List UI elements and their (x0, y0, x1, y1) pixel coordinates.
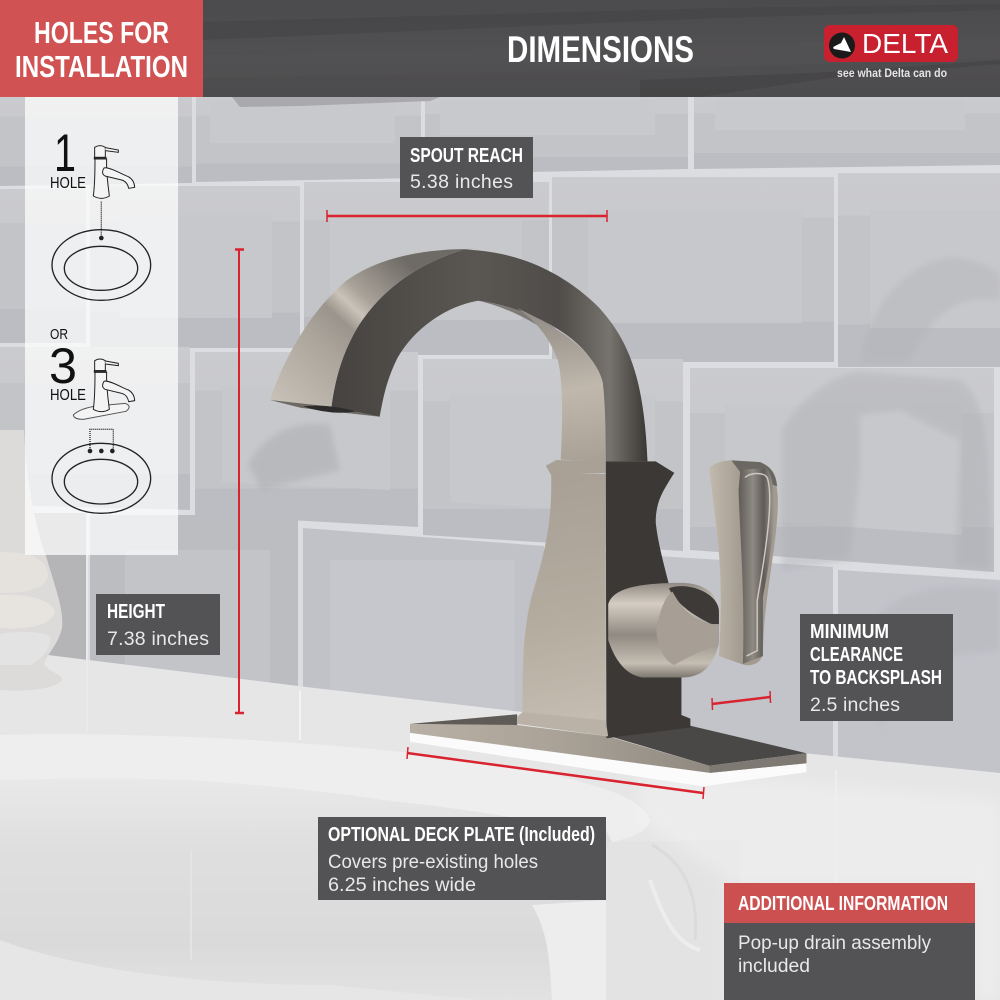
callout: additional information: ADDITIONAL INFORMATION (738, 893, 948, 915)
panel: holes for installation heading: HOLES FOR (34, 15, 169, 50)
dimension line: deck plate (407, 747, 704, 799)
callout: minimum clearance: CLEARANCE (810, 644, 903, 666)
handle (709, 460, 778, 665)
icon: three hole faucet and sink (52, 359, 151, 513)
callout: additional information: Pop-up drain assembly (738, 932, 931, 954)
label: 3 hole: HOLE (50, 387, 86, 404)
callout: additional information: included (738, 955, 810, 977)
background: wall of subway tiles (0, 0, 1000, 800)
faucet (270, 249, 806, 786)
deck plate (410, 714, 806, 773)
callout: spout reach: SPOUT REACH (410, 145, 523, 167)
callout: optional deck plate (318, 817, 606, 900)
logo: delta (824, 25, 958, 80)
callout: minimum clearance: 2.5 inches (810, 694, 900, 716)
callout: spout reach: 5.38 inches (410, 171, 513, 193)
callout: minimum clearance: TO BACKSPLASH (810, 667, 942, 689)
background: glass jar with stones (0, 430, 62, 691)
panel: holes for installation heading: INSTALLATION (15, 49, 188, 84)
callout: additional information (724, 883, 975, 1000)
title: dimensions: DIMENSIONS (507, 29, 694, 70)
faint reflections in tiles (782, 372, 990, 570)
label: 3 hole (49, 338, 86, 404)
white reflection under deck plate (410, 732, 806, 786)
callout: spout reach (400, 137, 533, 198)
dimension line: spout reach (327, 210, 607, 222)
callout: optional deck plate: OPTIONAL DECK PLATE (Included) (328, 824, 595, 846)
icon: one hole faucet and sink (52, 146, 151, 300)
logo: delta: DELTA (862, 28, 948, 59)
label: 1 hole: HOLE (50, 175, 86, 192)
callout: optional deck plate: Covers pre-existing holes (328, 851, 538, 873)
callout: optional deck plate: 6.25 inches wide (328, 874, 476, 896)
logo: delta: see what Delta can do (837, 66, 947, 80)
spout (270, 249, 647, 462)
callout: minimum clearance: MINIMUM (810, 621, 889, 643)
dimension line: height (235, 249, 244, 713)
background: counter and sink (0, 555, 1000, 1000)
label: 3 hole: 3 (49, 338, 77, 394)
dimension line: clearance (712, 691, 770, 710)
callout: minimum clearance (800, 614, 953, 721)
panel: hole options (25, 97, 178, 555)
label: or: OR (50, 326, 68, 343)
label: 1 hole: 1 (54, 124, 76, 183)
callout: height (96, 594, 220, 655)
body (517, 460, 690, 738)
callout: height: HEIGHT (107, 601, 165, 623)
valve cylinder (608, 583, 719, 677)
callout: height: 7.38 inches (107, 628, 209, 650)
header bar (203, 0, 1000, 97)
panel: holes for installation heading (0, 0, 203, 97)
